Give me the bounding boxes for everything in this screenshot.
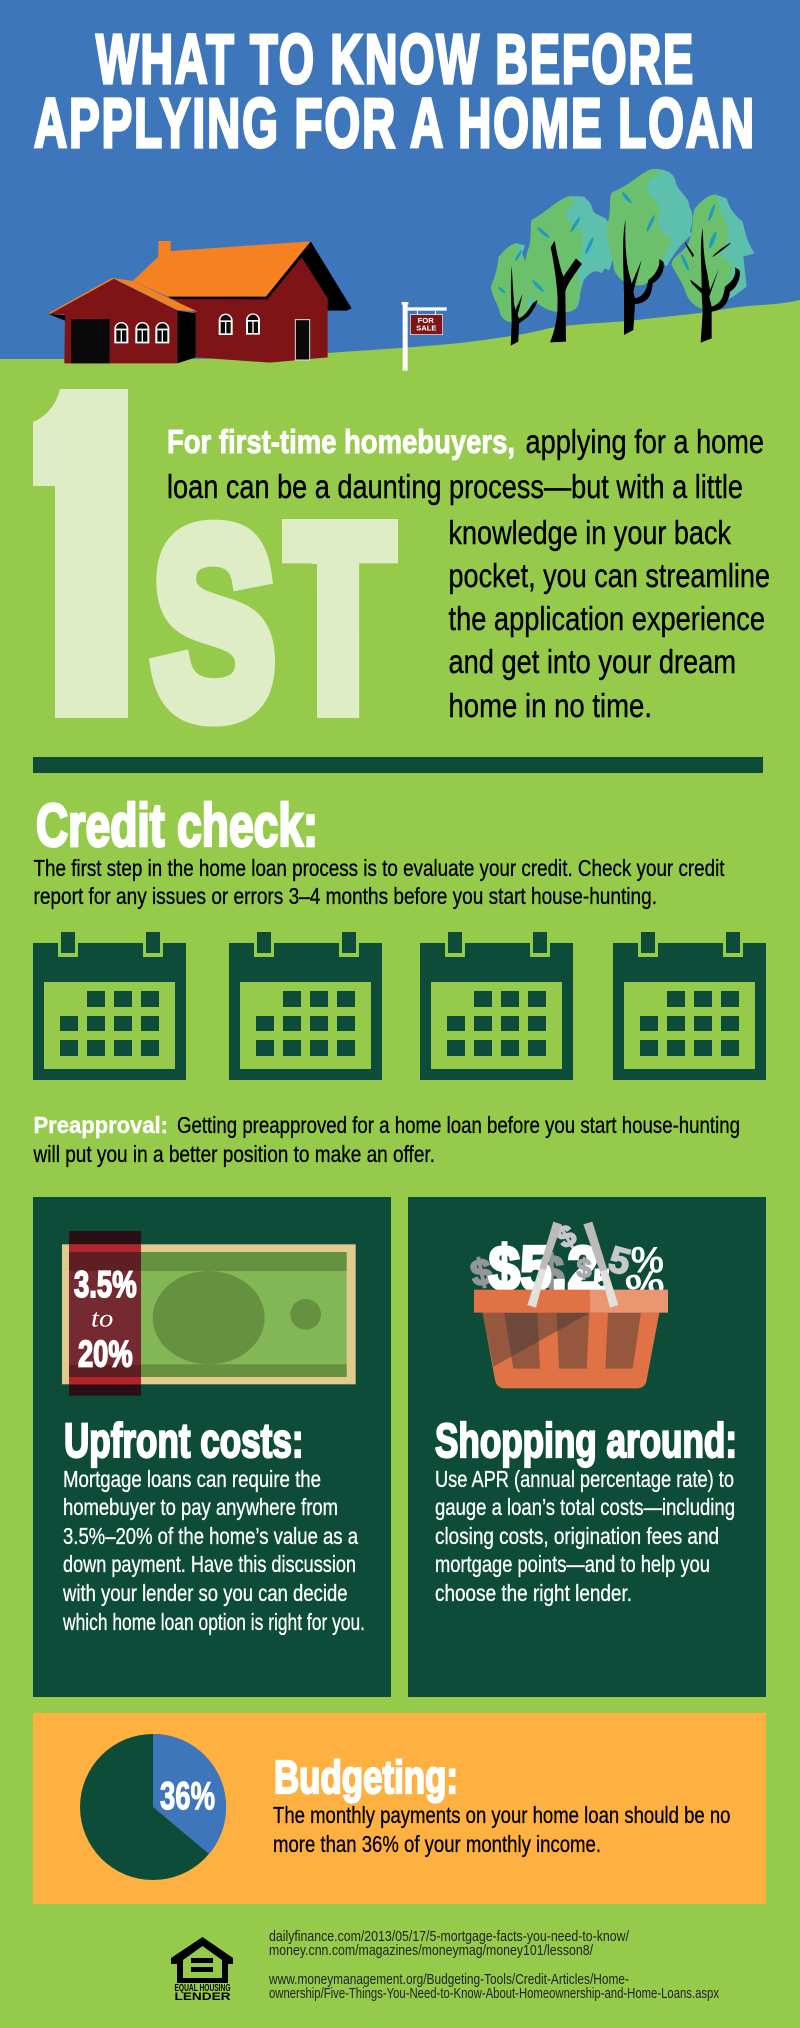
intro text: For first-time homebuyers, bbox=[167, 423, 515, 460]
credit check text bbox=[34, 855, 725, 909]
source references: www.moneymanagement.org/Budgeting-Tools/Credit-Articles/Home- bbox=[268, 1972, 629, 1988]
preapproval text: Preapproval: bbox=[34, 1112, 168, 1138]
upfront costs text bbox=[62, 1466, 365, 1635]
illustration: basket of rates: $ bbox=[538, 1245, 564, 1297]
illustration: basket of rates: $5.2 bbox=[489, 1234, 599, 1304]
pie chart: 36% bbox=[80, 1734, 226, 1880]
illustration: basket of rates: $ bbox=[551, 1218, 582, 1255]
intro text: and get into your dream bbox=[448, 643, 736, 680]
illustration: basket of rates: $ bbox=[467, 1250, 496, 1294]
upfront costs text: 3.5%–20% of the home’s value as a bbox=[63, 1523, 358, 1549]
divider bar bbox=[33, 757, 763, 773]
heading: credit check: Credit check: bbox=[36, 792, 318, 859]
icon: calendar 3 bbox=[420, 932, 573, 1080]
icon: calendar 4 bbox=[613, 932, 766, 1080]
illustration: basket of rates: 5 bbox=[605, 1238, 635, 1283]
intro text: home in no time. bbox=[448, 687, 652, 724]
illustration: dollar bill with percent band: 20% bbox=[78, 1333, 133, 1374]
big numeral: 1ST: 1 bbox=[31, 285, 143, 820]
background: blue sky bbox=[0, 0, 800, 359]
upfront costs text: which home loan option is right for you. bbox=[62, 1609, 365, 1635]
heading: upfront costs: Upfront costs: bbox=[64, 1415, 304, 1468]
shopping around text bbox=[435, 1466, 735, 1606]
upfront costs text: down payment. Have this discussion bbox=[63, 1551, 356, 1577]
big numeral: 1ST bbox=[33, 389, 398, 727]
shopping around text: closing costs, origination fees and bbox=[435, 1523, 719, 1549]
heading: budgeting: Budgeting: bbox=[274, 1751, 458, 1803]
panel: budgeting bbox=[33, 1713, 766, 1904]
pie chart: 36%: 36% bbox=[160, 1775, 215, 1818]
logo: equal housing lender: LENDER bbox=[174, 1991, 231, 2003]
illustration: basket of rates bbox=[467, 1218, 668, 1388]
illustration: basket of rates: % bbox=[631, 1240, 664, 1281]
logo: equal housing lender bbox=[171, 1937, 233, 2003]
illustration: dollar bill with percent band: 3.5% bbox=[74, 1264, 137, 1305]
illustration: dollar bill with percent band bbox=[62, 1231, 356, 1396]
shopping around text: choose the right lender. bbox=[435, 1580, 632, 1606]
source references bbox=[268, 1929, 720, 2002]
budgeting text bbox=[273, 1802, 730, 1857]
preapproval text: will put you in a better position to make an offer. bbox=[33, 1141, 435, 1167]
illustration: house bbox=[48, 241, 352, 363]
icon: calendar 1 bbox=[33, 932, 186, 1080]
source references: money.cnn.com/magazines/moneymag/money101/lesson8/ bbox=[269, 1943, 594, 1959]
panel: upfront costs bbox=[33, 1197, 391, 1697]
illustration: basket of rates: $ bbox=[577, 1253, 592, 1283]
shopping around text: mortgage points—and to help you bbox=[435, 1551, 710, 1577]
intro text bbox=[167, 423, 770, 724]
icon: calendar 2 bbox=[229, 932, 382, 1080]
upfront costs text: Mortgage loans can require the bbox=[63, 1466, 321, 1492]
logo: equal housing lender: EQUAL HOUSING bbox=[174, 1983, 231, 1994]
source references: dailyfinance.com/2013/05/17/5-mortgage-facts-you-need-to-know/ bbox=[269, 1929, 630, 1945]
illustration: basket of rates: 5 bbox=[593, 1264, 610, 1297]
illustration: for sale sign: FOR bbox=[418, 316, 434, 325]
illustration: trees bbox=[491, 169, 754, 346]
title bbox=[34, 20, 756, 162]
intro text: knowledge in your back bbox=[448, 514, 731, 551]
budgeting text: more than 36% of your monthly income. bbox=[273, 1831, 601, 1857]
big numeral: 1ST: S bbox=[152, 476, 275, 771]
illustration: dollar bill with percent band: to bbox=[91, 1305, 113, 1333]
shopping around text: gauge a loan’s total costs—including bbox=[435, 1494, 735, 1520]
illustration: basket of rates: % bbox=[622, 1263, 667, 1307]
credit check text: report for any issues or errors 3–4 months before you start house-hunting. bbox=[34, 883, 657, 909]
panel: shopping around bbox=[408, 1197, 766, 1697]
upfront costs text: homebuyer to pay anywhere from bbox=[63, 1494, 338, 1520]
upfront costs text: with your lender so you can decide bbox=[62, 1580, 347, 1606]
preapproval text bbox=[33, 1112, 740, 1167]
big numeral: 1ST: T bbox=[272, 457, 399, 780]
illustration: for sale sign bbox=[402, 302, 447, 371]
illustration: for sale sign: SALE bbox=[416, 323, 437, 332]
